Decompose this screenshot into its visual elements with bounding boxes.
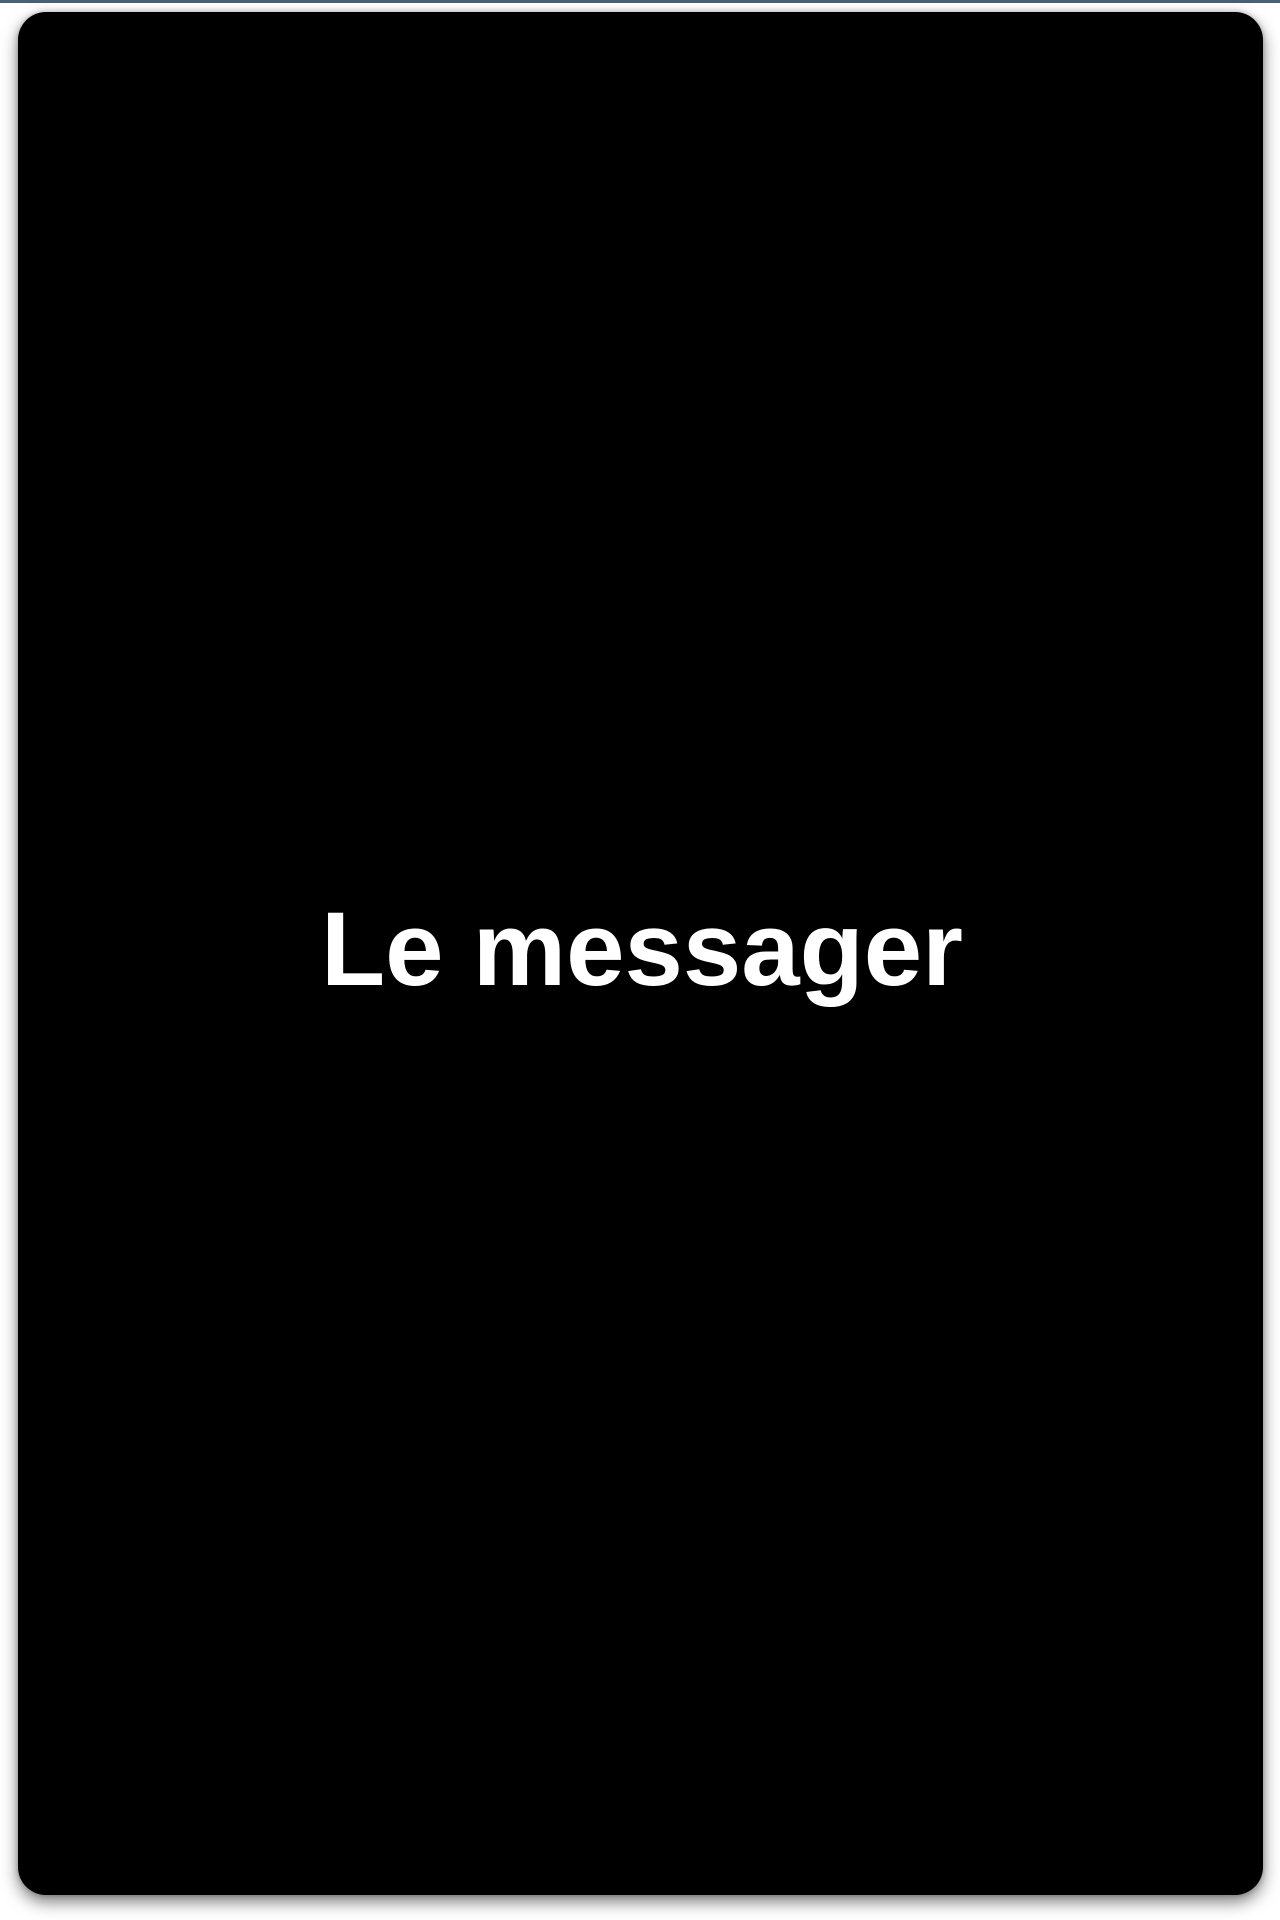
title: Le messager: [321, 891, 963, 1008]
top edge strip: [0, 0, 1280, 3]
